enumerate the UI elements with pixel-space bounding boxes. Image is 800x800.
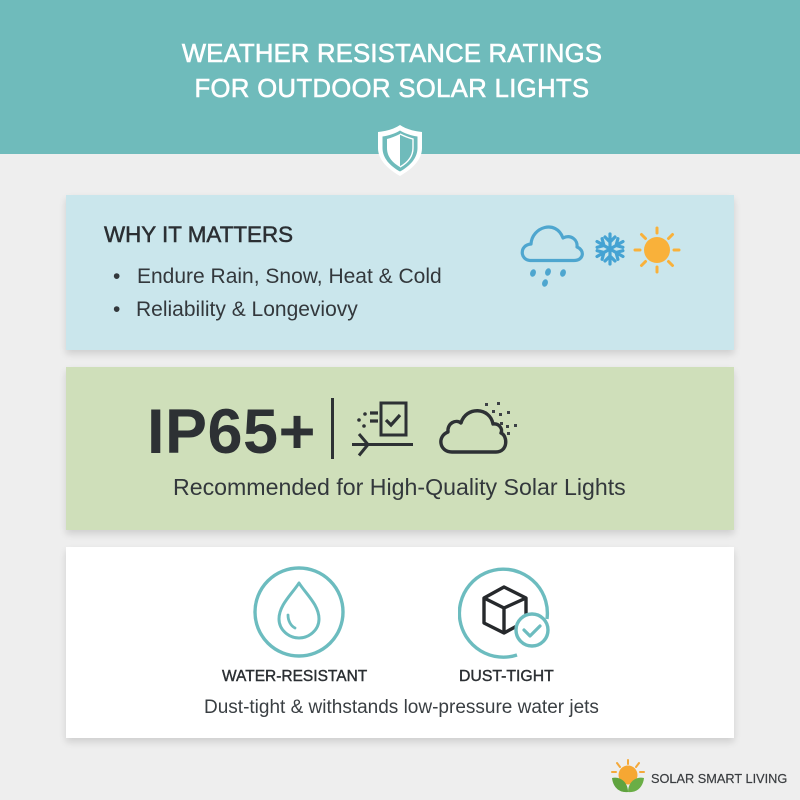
panel: protection features	[66, 547, 734, 738]
header band	[0, 0, 800, 154]
label: dust-tight: DUST-TIGHT	[459, 668, 554, 685]
icon: dust cloud	[439, 402, 517, 454]
icon: water jet test	[352, 402, 413, 456]
logo: solar smart living	[611, 759, 787, 792]
icon: dust-tight box	[458, 568, 550, 659]
bullet: reliability: •	[113, 298, 120, 321]
description: Dust-tight & withstands low-pressure water jets	[204, 697, 599, 718]
icon: sun and leaves	[611, 759, 645, 792]
icon: shield	[378, 125, 422, 176]
heading: why it matters: WHY IT MATTERS	[104, 222, 293, 247]
recommendation text: Recommended for High-Quality Solar Lights	[173, 474, 626, 500]
bullet: reliability: Reliability & Longeviovy	[136, 298, 358, 321]
label: water-resistant: WATER-RESISTANT	[222, 668, 367, 685]
title	[182, 40, 602, 103]
bullet: endure: Endure Rain, Snow, Heat & Cold	[137, 265, 442, 288]
divider	[331, 398, 334, 459]
panel: IP65+ recommendation	[66, 367, 734, 530]
icon: rain cloud	[520, 225, 584, 287]
bullet: endure: •	[113, 265, 120, 288]
icon: snowflake	[595, 232, 625, 266]
icon: sun	[634, 226, 680, 274]
brand name: SOLAR SMART LIVING	[651, 771, 787, 786]
title: WEATHER RESISTANCE RATINGS	[182, 40, 602, 68]
icon: water drop	[253, 566, 345, 658]
title: FOR OUTDOOR SOLAR LIGHTS	[195, 75, 589, 103]
IP65+ rating: IP65+	[147, 397, 316, 467]
panel: why it matters	[66, 195, 734, 350]
